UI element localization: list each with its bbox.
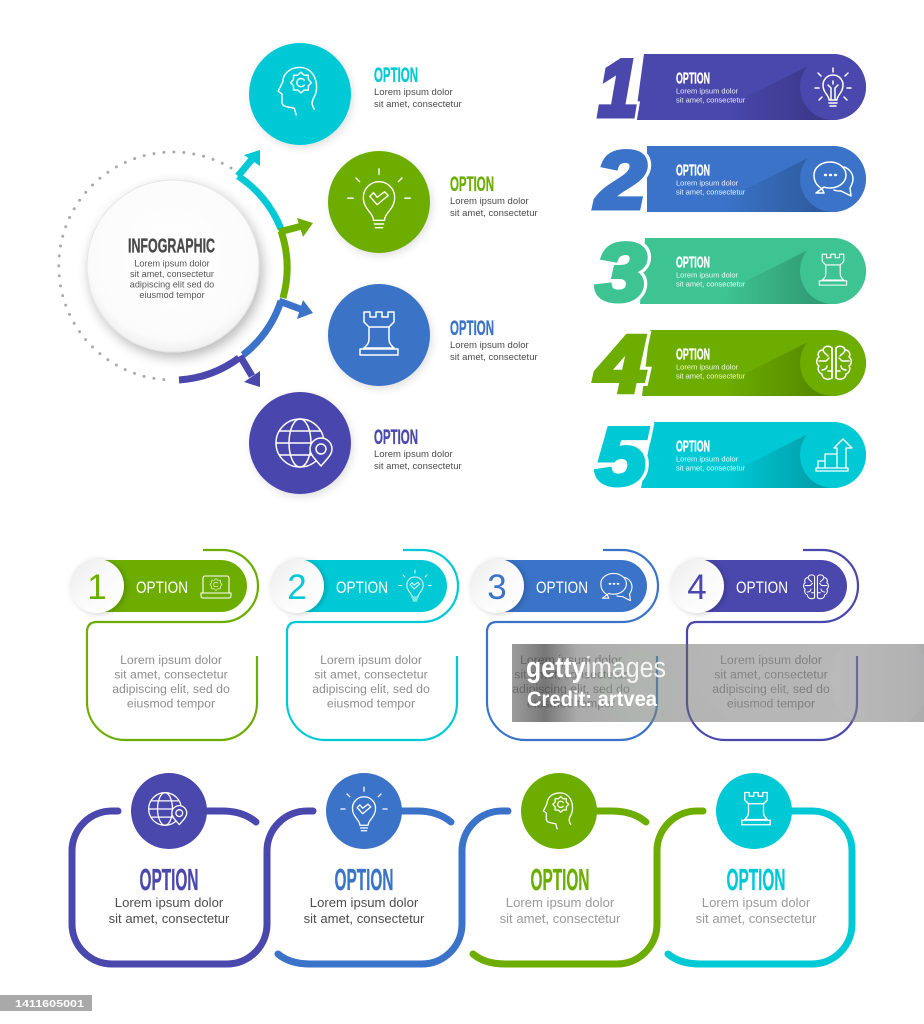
- panel: bottom card 2: OPTION: [334, 862, 394, 897]
- card text: Lorem ipsum dolor: [115, 895, 224, 910]
- banner text: sit amet, consectetur: [676, 464, 746, 472]
- panel: step card 3: [470, 550, 658, 740]
- centre title: INFOGRAPHIC: [128, 236, 215, 258]
- card text: eiusmod tempor: [727, 696, 815, 710]
- banner text: Lorem ipsum dolor: [676, 86, 739, 96]
- arrow: blue: [243, 300, 313, 355]
- node: green bulb: [328, 151, 430, 253]
- label: indigo option: Lorem ipsum dolor: [374, 449, 453, 460]
- icon: light bulb: [815, 68, 851, 106]
- card text: Lorem ipsum dolor: [120, 653, 222, 667]
- card text: sit amet, consectetur: [314, 668, 428, 682]
- card text: adipiscing elit, sed do: [312, 682, 430, 696]
- watermark credit text: Credit: artvea: [527, 688, 657, 711]
- label: blue option: OPTION: [450, 317, 494, 340]
- number 1: 1: [598, 44, 638, 134]
- centre disc: [87, 180, 259, 352]
- panel: bottom card 4: [668, 773, 852, 964]
- pill label: OPTION: [736, 578, 788, 597]
- number 2: 2: [594, 136, 646, 226]
- panel: step card 4: [670, 550, 858, 740]
- number badge 3: [470, 559, 524, 613]
- image id tag: [0, 995, 92, 1011]
- card text: Lorem ipsum dolor: [702, 895, 811, 910]
- label: green option: [450, 173, 538, 219]
- banner text: Lorem ipsum dolor: [676, 178, 739, 188]
- card text: Lorem ipsum dolor: [720, 653, 822, 667]
- icon: rook: [819, 254, 847, 285]
- watermark: getty images: [512, 644, 924, 722]
- panel: numbered banner 3: [596, 228, 866, 318]
- icon: rook: [742, 792, 770, 825]
- number 5: 5: [596, 412, 647, 502]
- arrow: cyan: [238, 150, 281, 229]
- dotted ring: [59, 152, 231, 380]
- centre body text: sit amet, consectetur: [130, 269, 214, 279]
- card text: Lorem ipsum dolor: [320, 653, 422, 667]
- icon: speech bubbles: [601, 573, 632, 601]
- number 1: 1: [598, 44, 638, 134]
- banner text: sit amet, consectetur: [676, 96, 746, 104]
- banner text: OPTION: [676, 162, 710, 180]
- banner text: Lorem ipsum dolor: [676, 270, 739, 280]
- card text: sit amet, consectetur: [696, 911, 817, 926]
- label: blue option: Lorem ipsum dolor: [450, 340, 529, 351]
- number 3: 3: [596, 228, 646, 318]
- panel: bottom card 3: OPTION: [530, 862, 590, 897]
- centre body text: Lorem ipsum dolor: [134, 258, 210, 268]
- label: green option: sit amet, consectetur: [450, 208, 538, 219]
- panel: bottom card 1: [72, 773, 313, 964]
- label: indigo option: OPTION: [374, 426, 418, 449]
- number badge 2: 2: [287, 568, 307, 607]
- number 3: 3: [596, 228, 646, 318]
- card text: sit amet, consectetur: [304, 911, 425, 926]
- pill label: OPTION: [536, 578, 588, 597]
- label: blue option: sit amet, consectetur: [450, 352, 538, 363]
- panel: bottom card 4: OPTION: [726, 862, 786, 897]
- banner text: [676, 162, 746, 196]
- number badge 2: [270, 559, 324, 613]
- card text: eiusmod tempor: [327, 696, 415, 710]
- icon: laptop gear: [201, 576, 231, 598]
- watermark logo text: gettyimages: [526, 652, 666, 684]
- icon: rook: [360, 312, 398, 355]
- panel: step card 2: [270, 550, 458, 740]
- icon: light bulb check: [348, 169, 410, 228]
- banner text: sit amet, consectetur: [676, 372, 746, 380]
- banner text: [676, 438, 746, 472]
- banner text: Lorem ipsum dolor: [676, 454, 739, 464]
- number badge 1: [70, 559, 124, 613]
- number badge 1: 1: [87, 568, 107, 607]
- image id tag: 1411605001: [15, 998, 84, 1010]
- icon: brain: [804, 575, 828, 599]
- centre body text: eiusmod tempor: [139, 290, 205, 300]
- label: green option: OPTION: [450, 173, 494, 196]
- number 2: 2: [594, 136, 646, 226]
- pill label: OPTION: [136, 578, 188, 597]
- icon: speech bubbles: [814, 162, 853, 196]
- panel: numbered banner 1: [598, 44, 866, 134]
- pill label: OPTION: [336, 578, 388, 597]
- card text: Lorem ipsum dolor: [520, 653, 622, 667]
- panel: numbered banner 2: [594, 136, 866, 226]
- icon: growth chart: [816, 439, 852, 471]
- card text: adipiscing elit, sed do: [512, 682, 630, 696]
- arrow: green: [279, 218, 313, 298]
- node: indigo globe: [249, 392, 351, 494]
- node: blue rook: [328, 284, 430, 386]
- banner text: sit amet, consectetur: [676, 188, 746, 196]
- number 4: 4: [594, 320, 646, 410]
- panel: step card 1: [70, 550, 258, 740]
- card text: adipiscing elit, sed do: [712, 682, 830, 696]
- card text: sit amet, consectetur: [114, 668, 228, 682]
- label: cyan option: sit amet, consectetur: [374, 99, 462, 110]
- banner text: OPTION: [676, 70, 710, 88]
- banner text: [676, 346, 746, 380]
- number badge 3: 3: [487, 568, 507, 607]
- banner text: sit amet, consectetur: [676, 280, 746, 288]
- arrow: indigo: [179, 356, 260, 387]
- card text: sit amet, consectetur: [500, 911, 621, 926]
- number 5: 5: [596, 412, 647, 502]
- card text: sit amet, consectetur: [109, 911, 230, 926]
- icon: head with gear: [543, 793, 573, 829]
- card text: Lorem ipsum dolor: [310, 895, 419, 910]
- banner text: OPTION: [676, 254, 710, 272]
- icon: globe with pin: [149, 793, 187, 825]
- banner text: OPTION: [676, 346, 710, 364]
- card text: Lorem ipsum dolor: [506, 895, 615, 910]
- banner text: [676, 254, 746, 288]
- node: cyan head gear: [249, 43, 351, 145]
- card text: adipiscing elit, sed do: [112, 682, 230, 696]
- card text: eiusmod tempor: [127, 696, 215, 710]
- panel: bottom card 1: OPTION: [140, 862, 198, 897]
- panel: bottom card 3: [473, 773, 703, 964]
- panel: numbered banner 5: [596, 412, 866, 502]
- label: indigo option: [374, 426, 462, 472]
- icon: light bulb check: [399, 570, 431, 601]
- label: indigo option: sit amet, consectetur: [374, 461, 462, 472]
- banner text: OPTION: [676, 438, 710, 456]
- icon: head with gear: [278, 67, 317, 115]
- label: cyan option: Lorem ipsum dolor: [374, 87, 453, 98]
- number badge 4: 4: [687, 568, 707, 607]
- panel: numbered banner 4: [594, 320, 866, 410]
- card text: sit amet, consectetur: [514, 668, 628, 682]
- icon: brain: [817, 346, 851, 379]
- number badge 4: [670, 559, 724, 613]
- label: blue option: [450, 317, 538, 363]
- panel: bottom card 2: [278, 773, 508, 964]
- label: cyan option: OPTION: [374, 64, 418, 87]
- label: cyan option: [374, 64, 462, 110]
- card text: eiusmod tempor: [527, 696, 615, 710]
- label: green option: Lorem ipsum dolor: [450, 196, 529, 207]
- icon: globe with pin: [276, 419, 332, 467]
- centre body text: adipiscing elit sed do: [130, 280, 214, 290]
- panel: radial diagram: [59, 43, 538, 494]
- card text: sit amet, consectetur: [714, 668, 828, 682]
- banner text: [676, 70, 746, 104]
- icon: light bulb check: [341, 787, 387, 831]
- number 4: 4: [594, 320, 646, 410]
- banner text: Lorem ipsum dolor: [676, 362, 739, 372]
